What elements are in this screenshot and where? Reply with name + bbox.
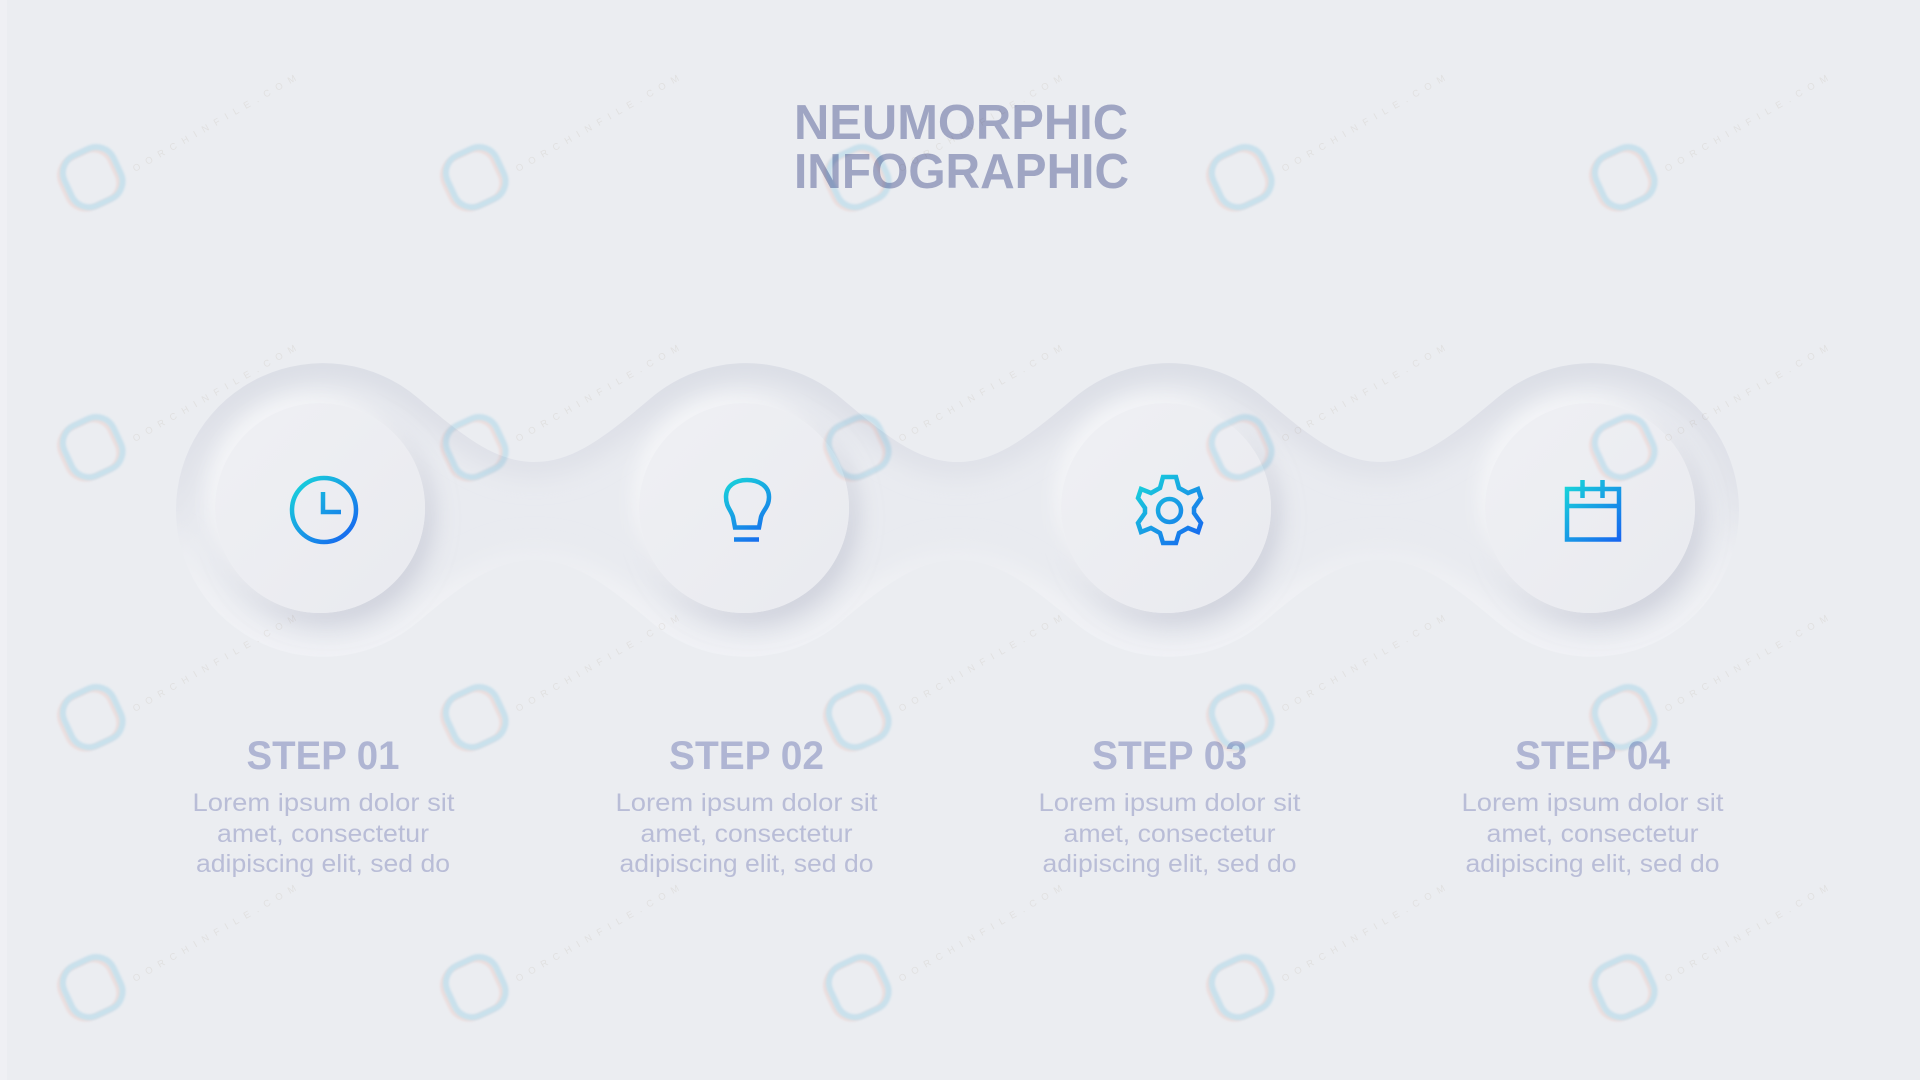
step 03 text: STEP 03	[1092, 734, 1247, 778]
watermark layer: OORCHINFILE.COM	[897, 343, 1064, 445]
watermark layer: OORCHINFILE.COM	[514, 343, 681, 445]
step 03 text: amet, consectetur	[1064, 820, 1276, 848]
step 04 text	[1462, 734, 1724, 878]
watermark layer: OORCHINFILE.COM	[131, 883, 298, 985]
step 1 raised circle	[215, 403, 425, 613]
step 01 text: STEP 01	[246, 734, 400, 778]
step 04 text: STEP 04	[1515, 734, 1671, 778]
watermark layer: OORCHINFILE.COM	[131, 613, 298, 715]
watermark layer: OORCHINFILE.COM	[514, 73, 681, 175]
title: INFOGRAPHIC	[794, 144, 1129, 199]
step 4 raised circle	[1485, 403, 1695, 613]
step 3 raised circle	[1061, 403, 1271, 613]
step 04 text: Lorem ipsum dolor sit	[1462, 789, 1724, 817]
title: NEUMORPHIC	[794, 95, 1128, 150]
title	[794, 95, 1129, 199]
panel: recessed connector track	[178, 363, 1738, 491]
step 2 raised circle	[639, 403, 849, 613]
icon: clock	[292, 478, 356, 542]
step 01 text: adipiscing elit, sed do	[196, 850, 450, 878]
watermark layer: OORCHINFILE.COM	[1663, 613, 1830, 715]
step 02 text: Lorem ipsum dolor sit	[616, 789, 878, 817]
step 04 text: amet, consectetur	[1486, 820, 1698, 848]
step 03 text: adipiscing elit, sed do	[1042, 850, 1296, 878]
step 03 text	[1038, 734, 1301, 878]
watermark layer: OORCHINFILE.COM	[897, 883, 1064, 985]
watermark layer: OORCHINFILE.COM	[897, 613, 1064, 715]
step 02 text	[616, 734, 878, 878]
step 03 text: Lorem ipsum dolor sit	[1038, 789, 1301, 817]
step 02 text: adipiscing elit, sed do	[620, 850, 874, 878]
watermark layer: OORCHINFILE.COM	[1280, 343, 1447, 445]
step 01 text: amet, consectetur	[217, 820, 429, 848]
icon: calendar	[1567, 480, 1619, 540]
watermark layer: OORCHINFILE.COM	[897, 73, 1064, 175]
watermark layer: OORCHINFILE.COM	[131, 343, 298, 445]
step 01 text: Lorem ipsum dolor sit	[192, 789, 455, 817]
watermark layer: OORCHINFILE.COM	[1663, 883, 1830, 985]
step 04 text: adipiscing elit, sed do	[1466, 850, 1720, 878]
step 02 text: amet, consectetur	[640, 820, 852, 848]
icon: light bulb	[726, 480, 769, 540]
watermark layer: OORCHINFILE.COM	[514, 613, 681, 715]
step 02 text: STEP 02	[669, 734, 824, 778]
watermark layer: OORCHINFILE.COM	[1280, 613, 1447, 715]
icon: gear	[1138, 477, 1201, 543]
watermark layer: OORCHINFILE.COM	[131, 73, 298, 175]
watermark layer: OORCHINFILE.COM	[1663, 343, 1830, 445]
watermark layer: OORCHINFILE.COM	[1280, 73, 1447, 175]
watermark layer: OORCHINFILE.COM	[514, 883, 681, 985]
watermark layer: OORCHINFILE.COM	[1663, 73, 1830, 175]
watermark layer: OORCHINFILE.COM	[1280, 883, 1447, 985]
step 01 text	[192, 734, 455, 878]
